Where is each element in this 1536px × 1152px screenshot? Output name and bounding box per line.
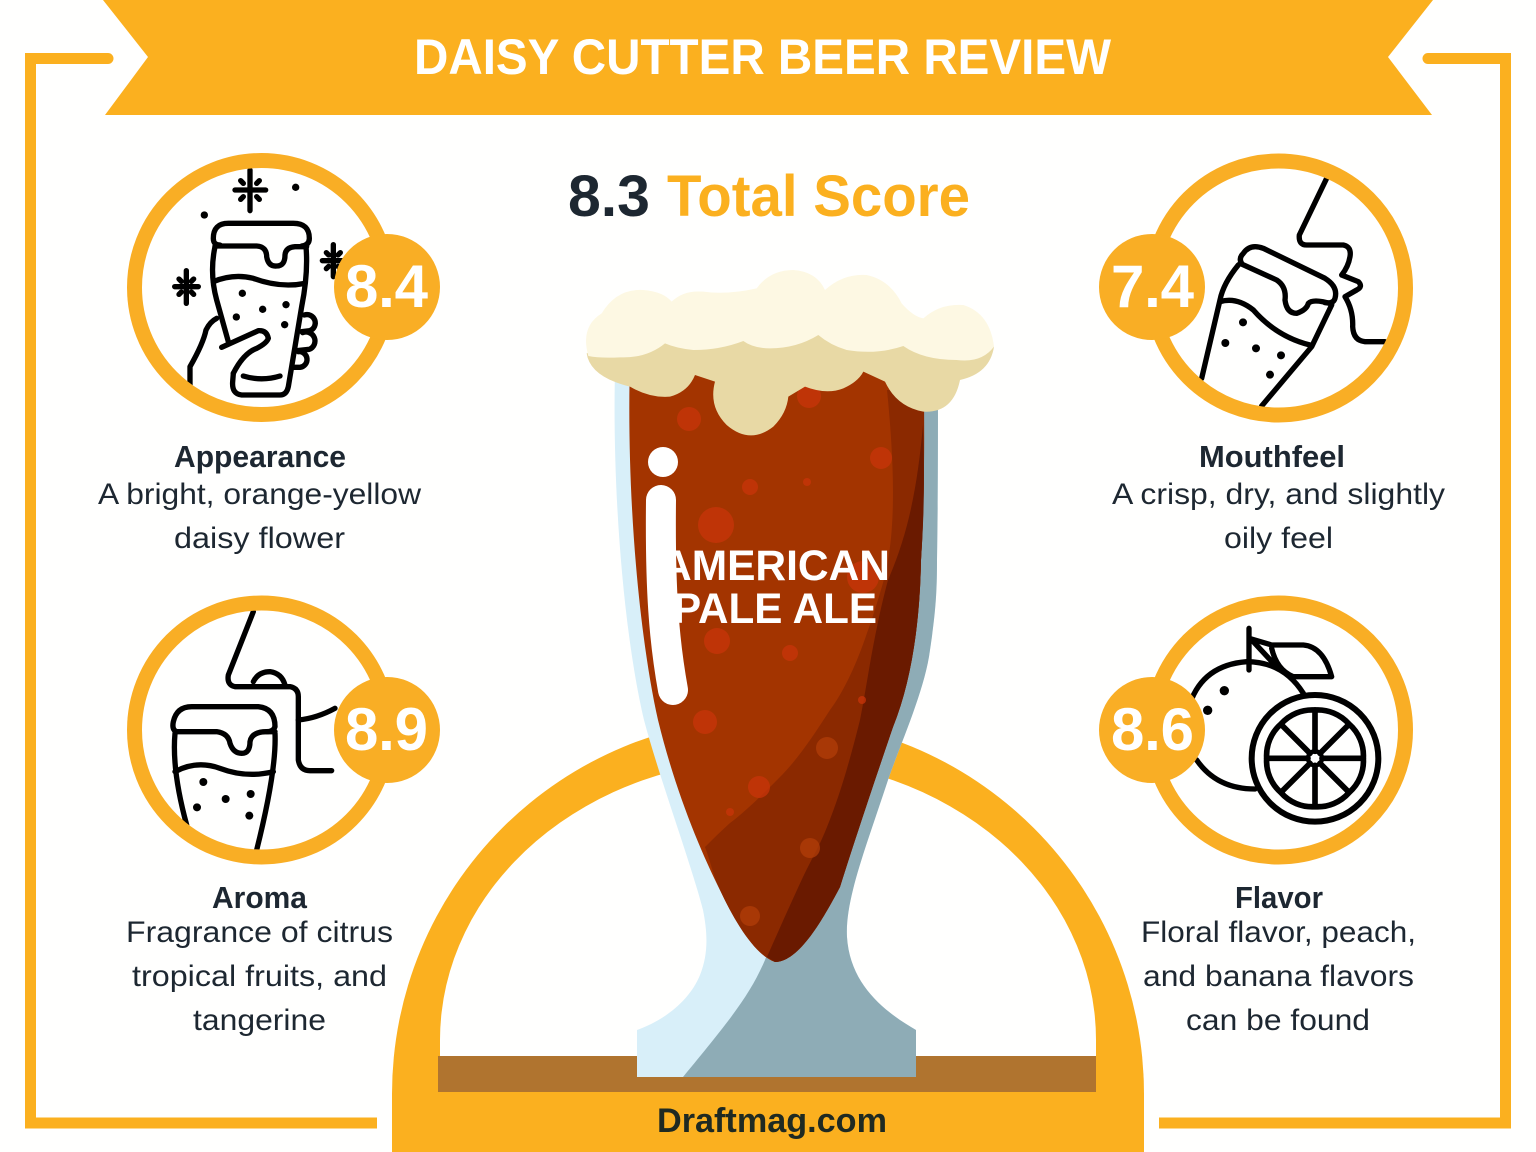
- total score heading: Total Score: [667, 164, 970, 229]
- glass highlight: [648, 447, 678, 690]
- ring: [1152, 603, 1406, 857]
- title: DAISY CUTTER BEER REVIEW: [414, 29, 1112, 85]
- beer body: [629, 360, 924, 962]
- text: flavor: Floral flavor, peach,: [1141, 916, 1416, 949]
- icon: hand holding beer: [175, 170, 343, 395]
- beer style label: [661, 542, 890, 633]
- panel: flavor: [1099, 603, 1416, 1037]
- score badge: [334, 234, 440, 340]
- panel: appearance: [98, 160, 440, 555]
- text: mouthfeel: Mouthfeel: [1199, 439, 1345, 474]
- text: appearance: A bright, orange-yellow: [98, 478, 421, 511]
- score badge: [1099, 677, 1205, 783]
- score badge: [334, 677, 440, 783]
- arch behind the beer glass: [392, 718, 1144, 1152]
- text: appearance: Appearance: [174, 439, 346, 474]
- ring: [134, 160, 388, 414]
- beer style label: AMERICAN: [661, 542, 890, 590]
- score badge: 8.9: [345, 696, 428, 763]
- beer bubbles: [677, 384, 892, 926]
- icon: orange and slice: [1190, 628, 1378, 822]
- text: mouthfeel: oily feel: [1224, 522, 1333, 555]
- source credit: Draftmag.com: [657, 1102, 887, 1140]
- glass shaded side: [683, 370, 938, 1077]
- beer dark shadow: [767, 425, 924, 962]
- text: aroma: tropical fruits, and: [132, 960, 387, 993]
- glass light side: [615, 370, 938, 1077]
- text: aroma: Aroma: [212, 880, 308, 915]
- wooden table: [438, 1056, 1096, 1092]
- text: flavor: [1141, 880, 1416, 1037]
- total score heading: 8.3: [568, 164, 650, 229]
- text: aroma: Fragrance of citrus: [126, 916, 393, 949]
- text: aroma: tangerine: [193, 1004, 326, 1037]
- ring: [134, 603, 388, 857]
- icon: nose smelling beer: [173, 612, 335, 850]
- text: appearance: daisy flower: [174, 522, 345, 555]
- score badge: 8.6: [1111, 696, 1194, 763]
- panel: mouthfeel: [1099, 161, 1445, 555]
- illustration: beer glass: [586, 270, 994, 1077]
- beer style label: PALE ALE: [673, 585, 877, 633]
- icon: beer tilted to lips: [1202, 178, 1385, 406]
- text: flavor: Flavor: [1235, 880, 1323, 915]
- beer foam: [586, 270, 994, 435]
- text: appearance: [98, 439, 421, 555]
- panel: aroma: [126, 603, 440, 1037]
- text: mouthfeel: A crisp, dry, and slightly: [1112, 478, 1445, 511]
- text: flavor: can be found: [1186, 1004, 1370, 1037]
- text: aroma: [126, 880, 393, 1037]
- score badge: 7.4: [1111, 253, 1195, 320]
- score badge: 8.4: [345, 253, 429, 320]
- ring: [1152, 161, 1406, 415]
- text: flavor: and banana flavors: [1143, 960, 1414, 993]
- text: mouthfeel: [1112, 439, 1445, 555]
- title banner: [103, 0, 1433, 115]
- score badge: [1099, 234, 1205, 340]
- beer mid shadow: [705, 390, 924, 962]
